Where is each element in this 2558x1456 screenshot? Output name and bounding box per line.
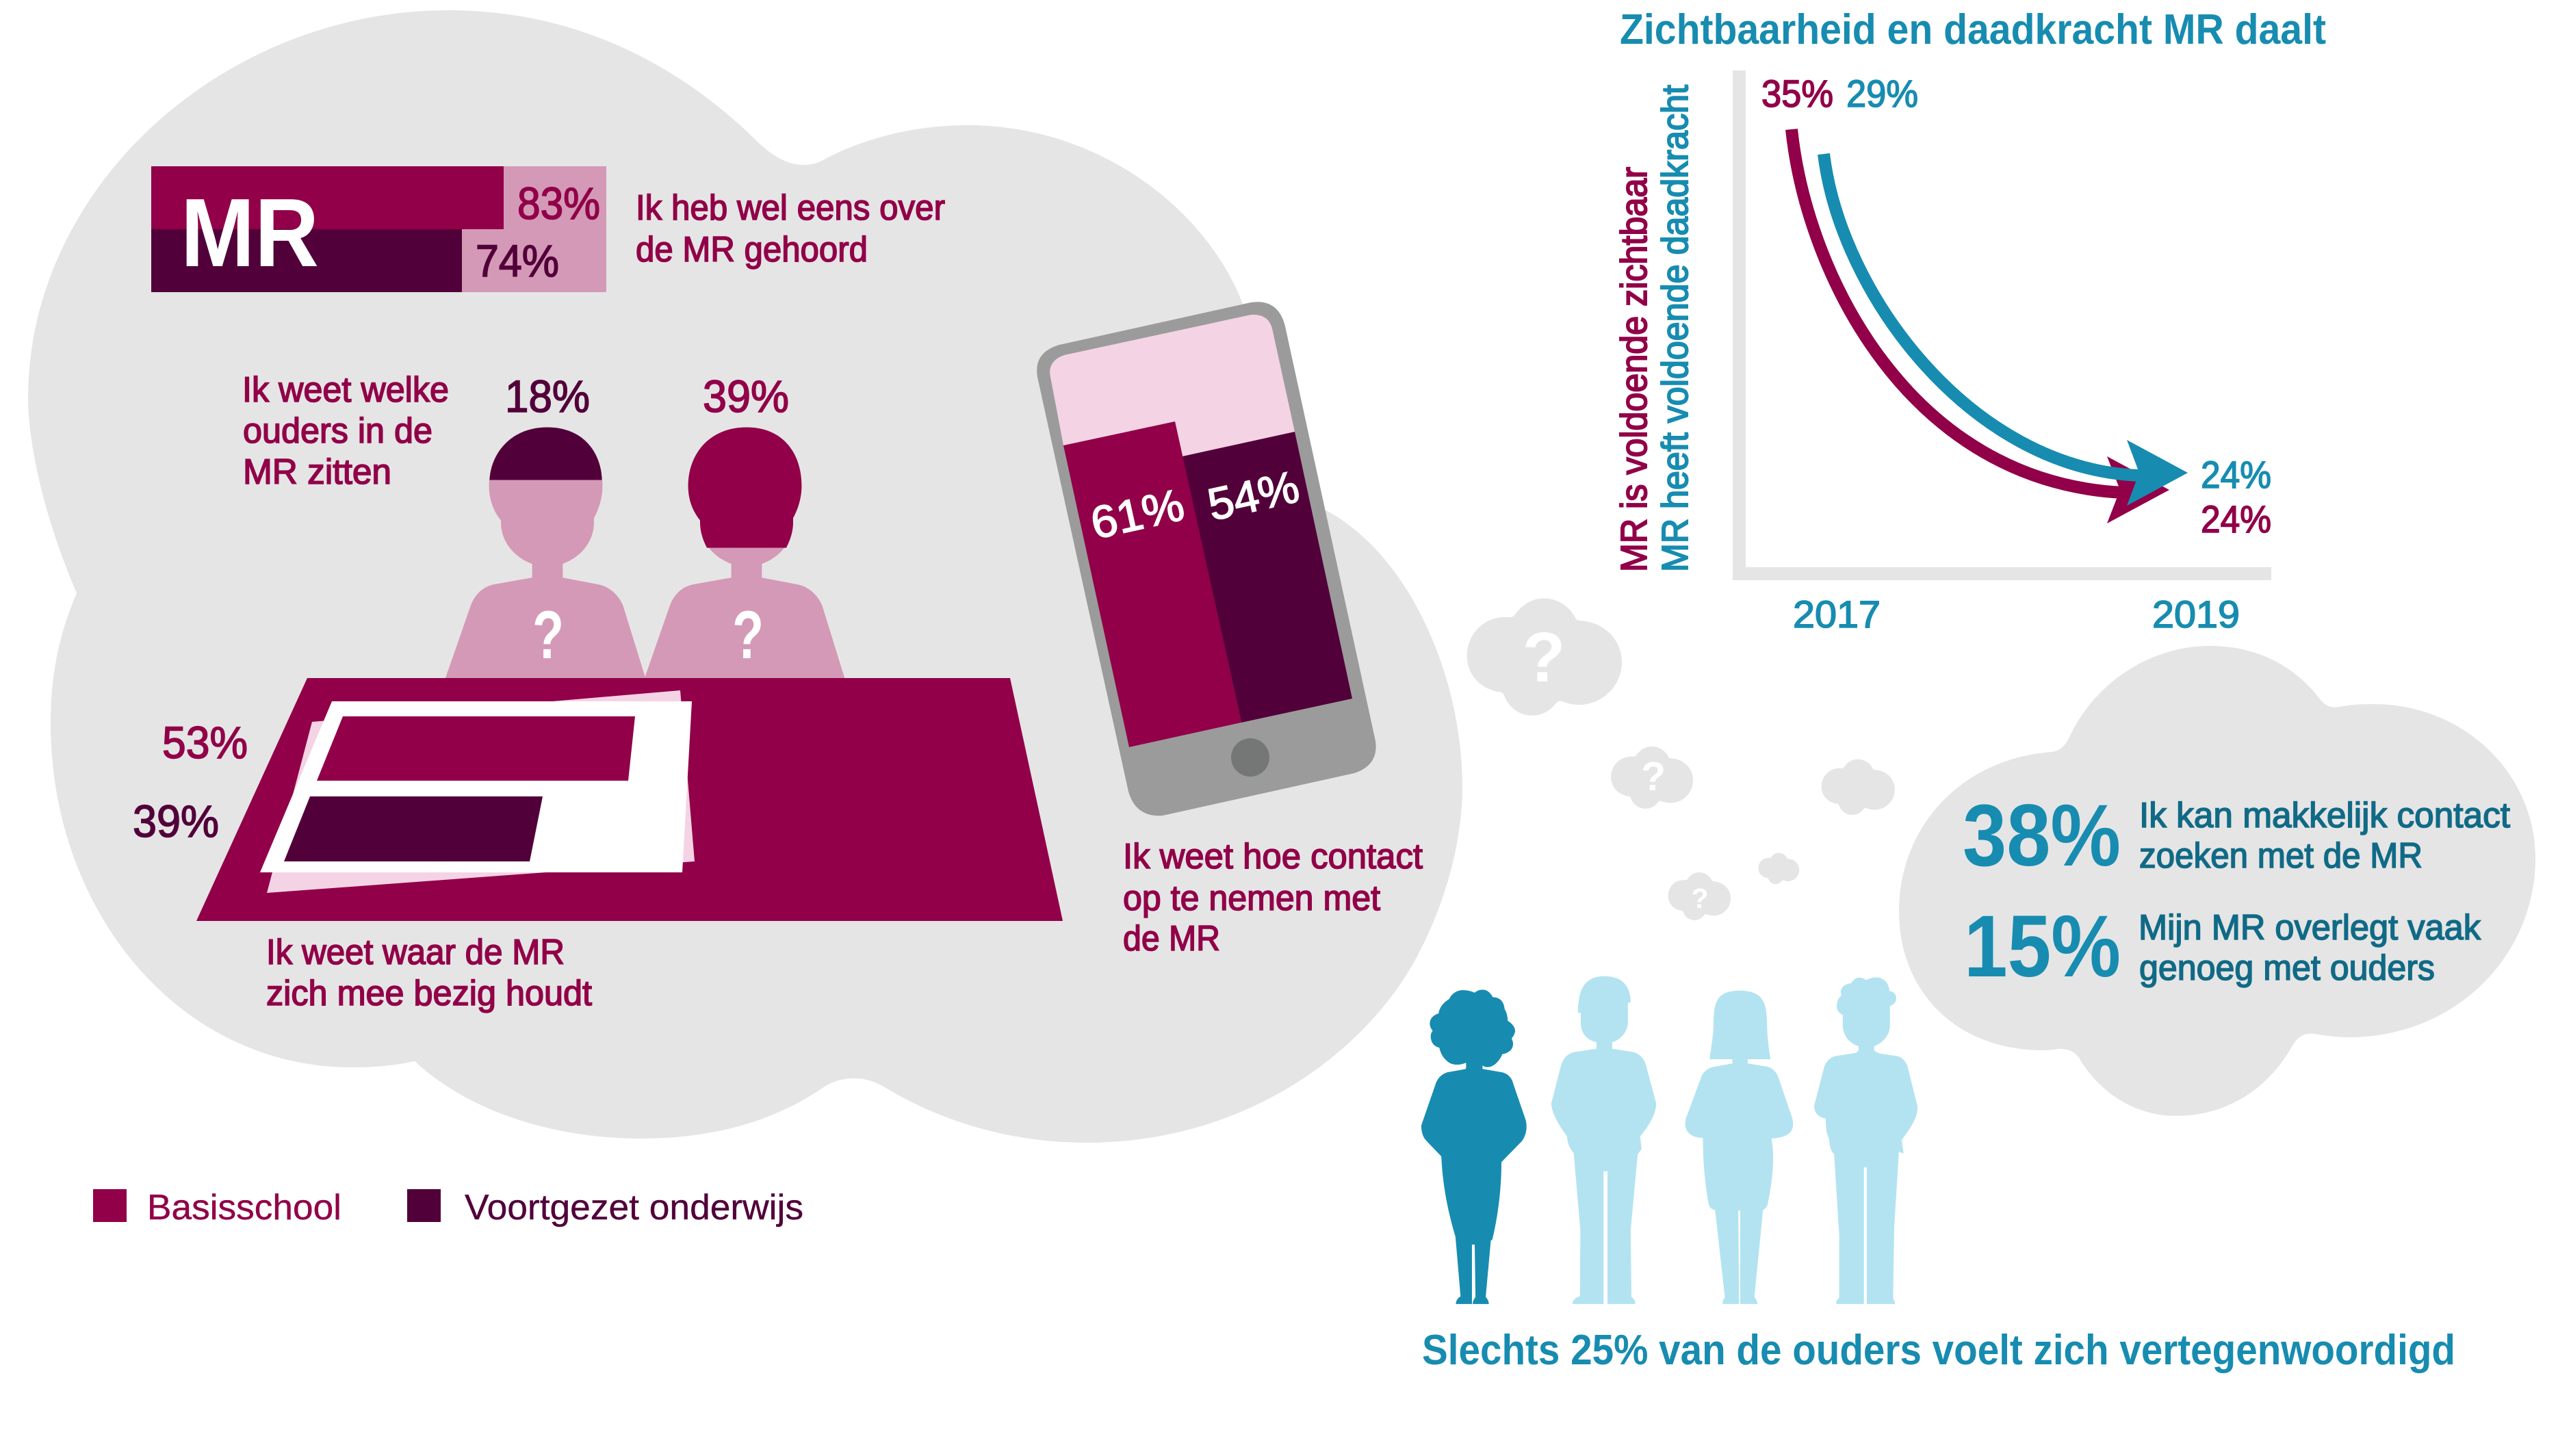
- panel: large grey thought cloud: [28, 10, 1462, 1143]
- value: 83%: 83%: [517, 178, 600, 229]
- icon: small cloud with question mark: [1611, 746, 1693, 809]
- bar: Voortgezet onderwijs 74%: [151, 229, 462, 292]
- year: 2019: 2019: [2152, 593, 2240, 636]
- text: consultation: genoeg met ouders: [2139, 948, 2435, 988]
- text: consultation: Mijn MR overlegt vaak: [2139, 908, 2481, 948]
- value: 24% teal: 24%: [2201, 453, 2271, 496]
- text: know which parents: [242, 370, 449, 492]
- text: know how to contact: de MR: [1123, 919, 1220, 959]
- title: Zichtbaarheid en daadkracht MR daalt: [1620, 6, 2326, 53]
- icon: small cloud with question mark: [1668, 872, 1731, 920]
- text: know how to contact: op te nemen met: [1123, 879, 1381, 918]
- question mark: ?: [732, 597, 764, 673]
- label: Basisschool: Basisschool: [147, 1188, 341, 1227]
- chart: table with papers: [196, 678, 1063, 921]
- phone body: [1037, 302, 1376, 816]
- bar: 61%: [1063, 421, 1241, 747]
- text: heard of the MR: Ik heb wel eens over: [636, 188, 945, 228]
- bar: 53%: [317, 716, 635, 781]
- swatch: Basisschool: [93, 1189, 127, 1222]
- icon: small cloud with question mark: ?: [1641, 754, 1666, 799]
- value: 35%: 35%: [1761, 72, 1833, 115]
- value: 74%: 74%: [476, 235, 559, 286]
- icon: group of four parents: [1421, 976, 1917, 1304]
- year: 2017: 2017: [1793, 593, 1881, 636]
- legend: [93, 1188, 803, 1227]
- white sheet: [260, 701, 692, 872]
- person: parent 4: [1814, 978, 1917, 1304]
- text: contact: [2139, 796, 2511, 876]
- text: contact: Ik kan makkelijk contact: [2139, 796, 2511, 835]
- table top: [196, 678, 1063, 921]
- text: know which parents: Ik weet welke: [242, 370, 449, 410]
- arrow: daadkracht: [1824, 154, 2188, 506]
- value: 29%: 29%: [1846, 72, 1918, 115]
- text: heard of the MR: [636, 188, 945, 270]
- value: 61%: 61%: [1086, 479, 1189, 549]
- person: represented parent: [1421, 990, 1527, 1304]
- screen: [1050, 315, 1295, 456]
- hair fill: maroon: [688, 427, 801, 548]
- bar: 39%: [284, 796, 543, 861]
- text: heard of the MR: de MR gehoord: [636, 230, 868, 270]
- person: parent 2: [1551, 976, 1656, 1304]
- icon: small cloud with question mark: ?: [1523, 618, 1565, 697]
- y label: zichtbaar: MR is voldoende zichtbaar: [1614, 167, 1655, 572]
- chart: decline arrows: [1614, 70, 2271, 636]
- label: MR: MR: [181, 179, 319, 287]
- hair fill: dark: [489, 427, 602, 480]
- icon: small cloud with question mark: ?: [1691, 883, 1709, 914]
- heading: only 25% feel represented: Slechts 25% van de ouders voelt zich vertegenwoordigd: [1422, 1327, 2455, 1374]
- text: know how to contact: [1123, 837, 1423, 959]
- icon: tiny cloud: [1759, 853, 1799, 884]
- text: know how to contact: Ik weet hoe contact: [1123, 837, 1423, 876]
- person: parent 3: [1685, 991, 1793, 1304]
- bar chart: heard of the MR: [151, 166, 606, 292]
- bar background: [151, 166, 606, 292]
- text: know which parents: MR zitten: [243, 452, 391, 492]
- text: know what the MR does: Ik weet waar de MR: [266, 933, 565, 972]
- value: 38%: 38%: [1963, 787, 2121, 885]
- text: know which parents: ouders in de: [243, 411, 432, 451]
- bar: 54%: [1183, 432, 1352, 723]
- home button: [1231, 738, 1269, 777]
- text: know what the MR does: zich mee bezig houdt: [266, 974, 593, 1013]
- text: consultation: [2139, 908, 2481, 988]
- value: 54%: 54%: [1203, 460, 1304, 530]
- value: 39%: 39%: [703, 371, 789, 421]
- arrow: zichtbaar: [1792, 129, 2169, 523]
- label: Voortgezet onderwijs: Voortgezet onderwijs: [465, 1188, 803, 1227]
- icon: small cloud with question mark: [1467, 599, 1622, 716]
- y label: daadkracht: MR heeft voldoende daadkracht: [1655, 85, 1696, 572]
- icon: person 39%: [645, 427, 844, 679]
- panel: right thought cloud: [1899, 646, 2535, 1116]
- icon: phone chart: [1037, 302, 1376, 816]
- pink sheet: [267, 690, 695, 893]
- icon: person 18%: [445, 427, 645, 679]
- axes: [1733, 70, 2271, 580]
- value: 53%: 53%: [162, 717, 248, 768]
- value: 15%: 15%: [1964, 898, 2121, 996]
- text: contact: zoeken met de MR: [2139, 836, 2423, 876]
- bar: Basisschool 83%: [151, 166, 504, 229]
- swatch: Voortgezet onderwijs: [407, 1189, 441, 1222]
- icon: small cloud: [1822, 759, 1895, 815]
- value: 18%: 18%: [505, 371, 590, 421]
- question mark: ?: [532, 597, 564, 673]
- text: know what the MR does: [266, 933, 593, 1013]
- value: 24% maroon: 24%: [2201, 497, 2271, 541]
- value: 39%: 39%: [133, 796, 219, 846]
